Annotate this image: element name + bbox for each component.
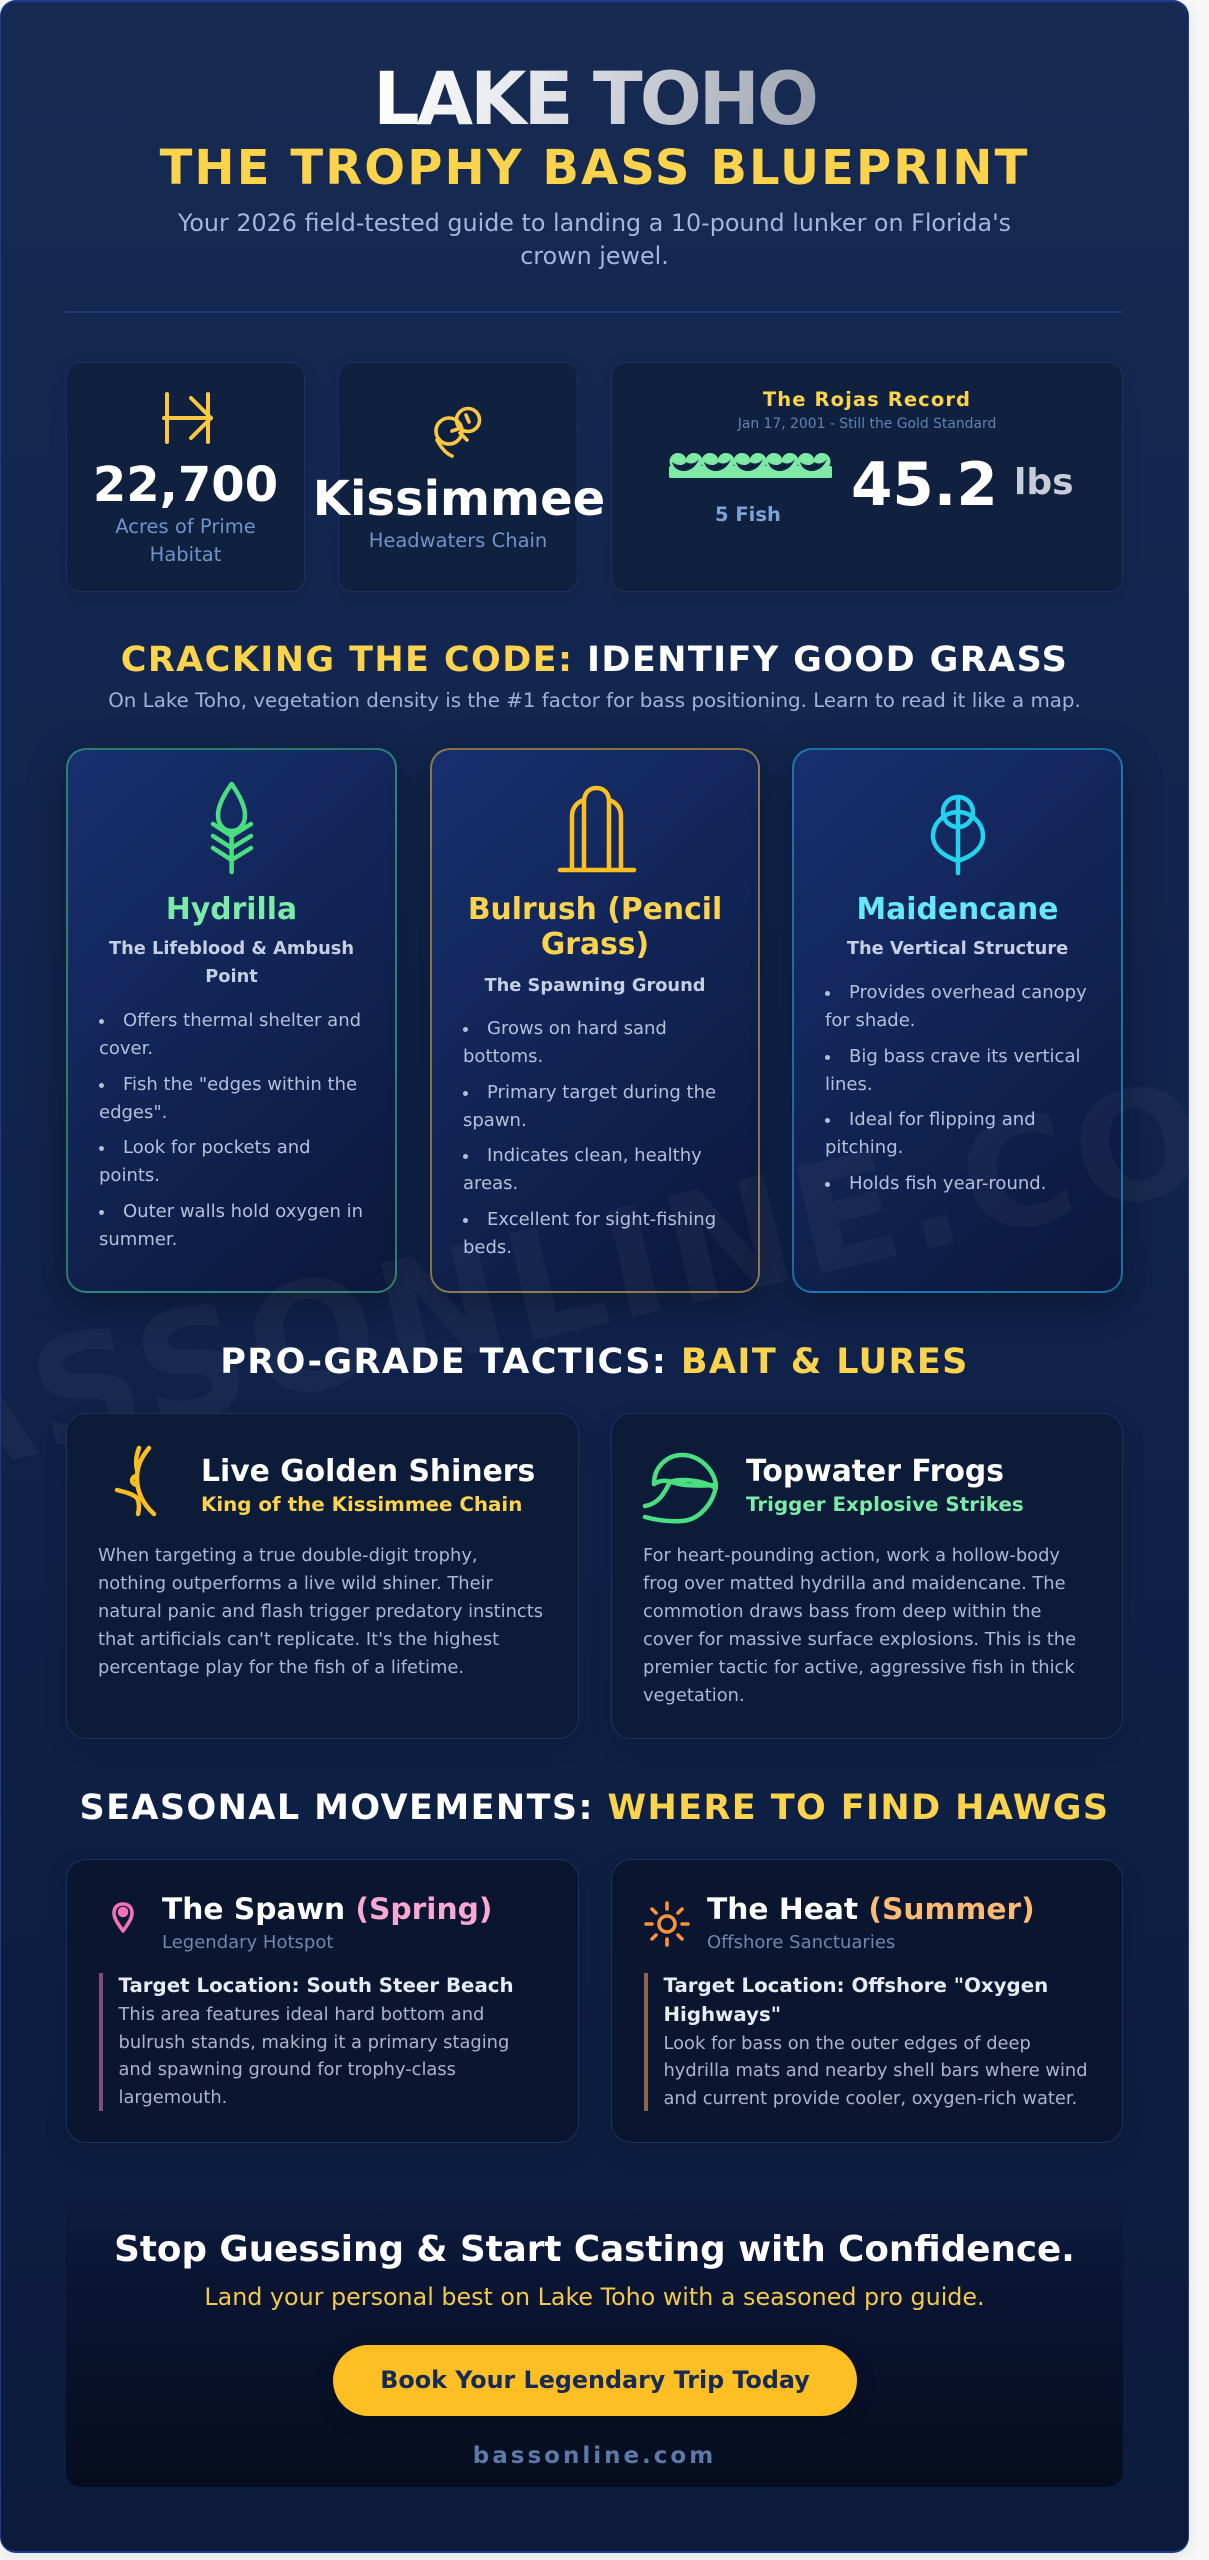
- bullet list: Ideal for flipping and: [849, 1109, 1036, 1130]
- target text: largemouth.: [118, 2087, 227, 2108]
- title: LAKE TOHO: [373, 57, 816, 142]
- panel: frogs: [611, 1413, 1123, 1739]
- bullet list: lines.: [825, 1074, 873, 1094]
- bullet list: [825, 982, 1087, 1194]
- bait description: For heart-pounding action, work a hollow-body: [643, 1545, 1060, 1566]
- plant role: The Spawning Ground: [485, 975, 705, 996]
- plant role: The Vertical Structure: [847, 938, 1068, 959]
- panel: summer: [611, 1859, 1123, 2143]
- plant name: Maidencane: [857, 892, 1058, 927]
- bullet list: for shade.: [825, 1010, 916, 1031]
- target text: Target Location: Offshore "Oxygen: [664, 1974, 1048, 1997]
- bullet list: [463, 1018, 716, 1258]
- header: [160, 57, 1029, 270]
- target text: Target Location: South Steer Beach: [118, 1974, 514, 1997]
- label: Headwaters Chain: [369, 529, 547, 552]
- cta headline: Stop Guessing & Start Casting with Confidence.: [114, 2229, 1075, 2270]
- bait description: cover for massive surface explosions. This is the: [643, 1629, 1076, 1650]
- intro text: Your 2026 field-tested guide to landing a 10-pound lunker on Florida's: [178, 209, 1011, 237]
- icon: hydrilla: [210, 782, 254, 874]
- fish label: 5 Fish: [715, 503, 781, 526]
- stat card: Kissimmee: [338, 362, 578, 592]
- icon: acres: [162, 392, 214, 444]
- bait tagline: King of the Kissimmee Chain: [201, 1493, 522, 1516]
- icon: five fish: [669, 453, 832, 478]
- icon: bulrush: [558, 786, 636, 872]
- panel: Hydrilla: [66, 748, 397, 1293]
- intro text: crown jewel.: [520, 242, 669, 270]
- record weight: 45.2: [851, 451, 998, 520]
- plant name: Bulrush (Pencil: [468, 892, 722, 927]
- call to action panel: [66, 2195, 1123, 2487]
- bait description: commotion draws bass from deep within the: [643, 1601, 1042, 1622]
- target text: [118, 1974, 514, 2108]
- bullet list: Fish the "edges within the: [123, 1074, 357, 1094]
- target text: Look for bass on the outer edges of deep: [664, 2033, 1031, 2054]
- target text: and spawning ground for trophy-class: [118, 2059, 456, 2080]
- bait description: When targeting a true double-digit trophy,: [98, 1545, 478, 1566]
- bullet list: spawn.: [463, 1110, 527, 1130]
- target text: and current provide cooler, oxygen-rich water.: [664, 2088, 1077, 2109]
- season subtitle: Offshore Sanctuaries: [707, 1932, 895, 1953]
- icon: sun: [644, 1901, 690, 1947]
- bullet list: points.: [99, 1165, 160, 1186]
- bullet list: Big bass crave its vertical: [849, 1046, 1080, 1066]
- bait title: Topwater Frogs: [746, 1454, 1004, 1489]
- label: Habitat: [150, 543, 221, 566]
- bullet list: Indicates clean, healthy: [487, 1145, 702, 1166]
- website: bassonline.com: [473, 2443, 716, 2469]
- bullet list: Outer walls hold oxygen in: [123, 1200, 363, 1222]
- bait description: frog over matted hydrilla and maidencane. The: [643, 1573, 1066, 1594]
- button: Book Your Legendary Trip Today: [380, 2366, 810, 2394]
- plant role: The Lifeblood & Ambush: [109, 938, 354, 959]
- target text: [664, 1974, 1088, 2109]
- accent bar: [644, 1973, 648, 2111]
- heading: CRACKING THE CODE: IDENTIFY GOOD GRASS: [121, 640, 1068, 680]
- bullet list: cover.: [99, 1038, 153, 1059]
- bait description: premier tactic for active, aggressive fish in thick: [643, 1657, 1075, 1678]
- target text: bulrush stands, making it a primary staging: [118, 2032, 509, 2053]
- value: Kissimmee: [313, 471, 605, 527]
- value: 22,700: [93, 457, 278, 513]
- unit: lbs: [1014, 462, 1074, 503]
- button: [333, 2345, 857, 2416]
- plant name: Grass): [541, 927, 649, 962]
- label: Acres of Prime: [115, 515, 256, 538]
- label: [115, 515, 256, 566]
- plant name: [468, 892, 722, 962]
- stat card: acres: [66, 362, 305, 592]
- icon: chain links: [434, 406, 482, 458]
- plant role: Point: [205, 966, 258, 987]
- bullet list: edges".: [99, 1102, 167, 1122]
- season title: The Spawn (Spring): [162, 1892, 492, 1927]
- target text: Highways": [664, 2003, 781, 2026]
- cta subline: Land your personal best on Lake Toho with a seasoned pro guide.: [204, 2283, 985, 2311]
- intro text: [178, 209, 1011, 270]
- plant name: Hydrilla: [166, 892, 297, 927]
- accent bar: [99, 1973, 103, 2111]
- icon: pin: [112, 1902, 134, 1933]
- bullet list: beds.: [463, 1236, 512, 1258]
- season title: The Heat (Summer): [707, 1892, 1035, 1927]
- bait description: vegetation.: [643, 1685, 745, 1706]
- icon: frog: [642, 1452, 718, 1524]
- panel: spring: [66, 1859, 579, 2143]
- bullet list: areas.: [463, 1173, 518, 1194]
- bullet list: bottoms.: [463, 1046, 543, 1067]
- record title: The Rojas Record: [763, 388, 971, 411]
- bait description: nothing outperforms a live wild shiner. Their: [98, 1573, 493, 1594]
- section heading: seasons: SEASONAL MOVEMENTS: WHERE TO FIND HAWGS: [79, 1788, 1110, 1828]
- bait description: percentage play for the fish of a lifetime.: [98, 1657, 464, 1678]
- bullet list: Look for pockets and: [123, 1137, 311, 1158]
- plant role: [109, 938, 354, 987]
- bullet list: pitching.: [825, 1137, 903, 1158]
- target text: This area features ideal hard bottom and: [118, 2004, 484, 2025]
- bait description: that artificials can't replicate. It's the highest: [98, 1629, 499, 1650]
- panel: Maidencane: [792, 748, 1123, 1293]
- bait title: Live Golden Shiners: [201, 1454, 535, 1489]
- bait tagline: Trigger Explosive Strikes: [746, 1493, 1024, 1516]
- bullet list: summer.: [99, 1228, 177, 1250]
- record date: Jan 17, 2001 - Still the Gold Standard: [738, 416, 996, 432]
- bait description: [98, 1545, 543, 1678]
- bullet list: Excellent for sight-fishing: [487, 1208, 716, 1230]
- panel: shiners: [66, 1413, 579, 1739]
- icon: maidencane: [930, 794, 986, 876]
- bullet list: Offers thermal shelter and: [123, 1010, 361, 1031]
- bullet list: Primary target during the: [487, 1082, 716, 1102]
- stat card: Rojas record: [611, 362, 1123, 592]
- bait description: natural panic and flash trigger predatory instincts: [98, 1601, 543, 1622]
- bullet list: Provides overhead canopy: [849, 982, 1087, 1003]
- season subtitle: Legendary Hotspot: [162, 1932, 333, 1953]
- panel: Bulrush: [430, 748, 760, 1293]
- icon: shiner: [114, 1446, 156, 1516]
- bullet list: Grows on hard sand: [487, 1018, 667, 1039]
- bait description: [643, 1545, 1076, 1706]
- section heading: tactics: PRO-GRADE TACTICS: BAIT & LURES: [220, 1342, 969, 1382]
- section heading: grass: [108, 640, 1081, 712]
- subtitle: THE TROPHY BASS BLUEPRINT: [160, 140, 1029, 196]
- target text: hydrilla mats and nearby shell bars where wind: [664, 2060, 1088, 2081]
- bullet list: [99, 1010, 363, 1250]
- bullet list: Holds fish year-round.: [849, 1172, 1046, 1194]
- section intro: On Lake Toho, vegetation density is the #1 factor for bass positioning. Learn to read it like a map.: [108, 689, 1081, 712]
